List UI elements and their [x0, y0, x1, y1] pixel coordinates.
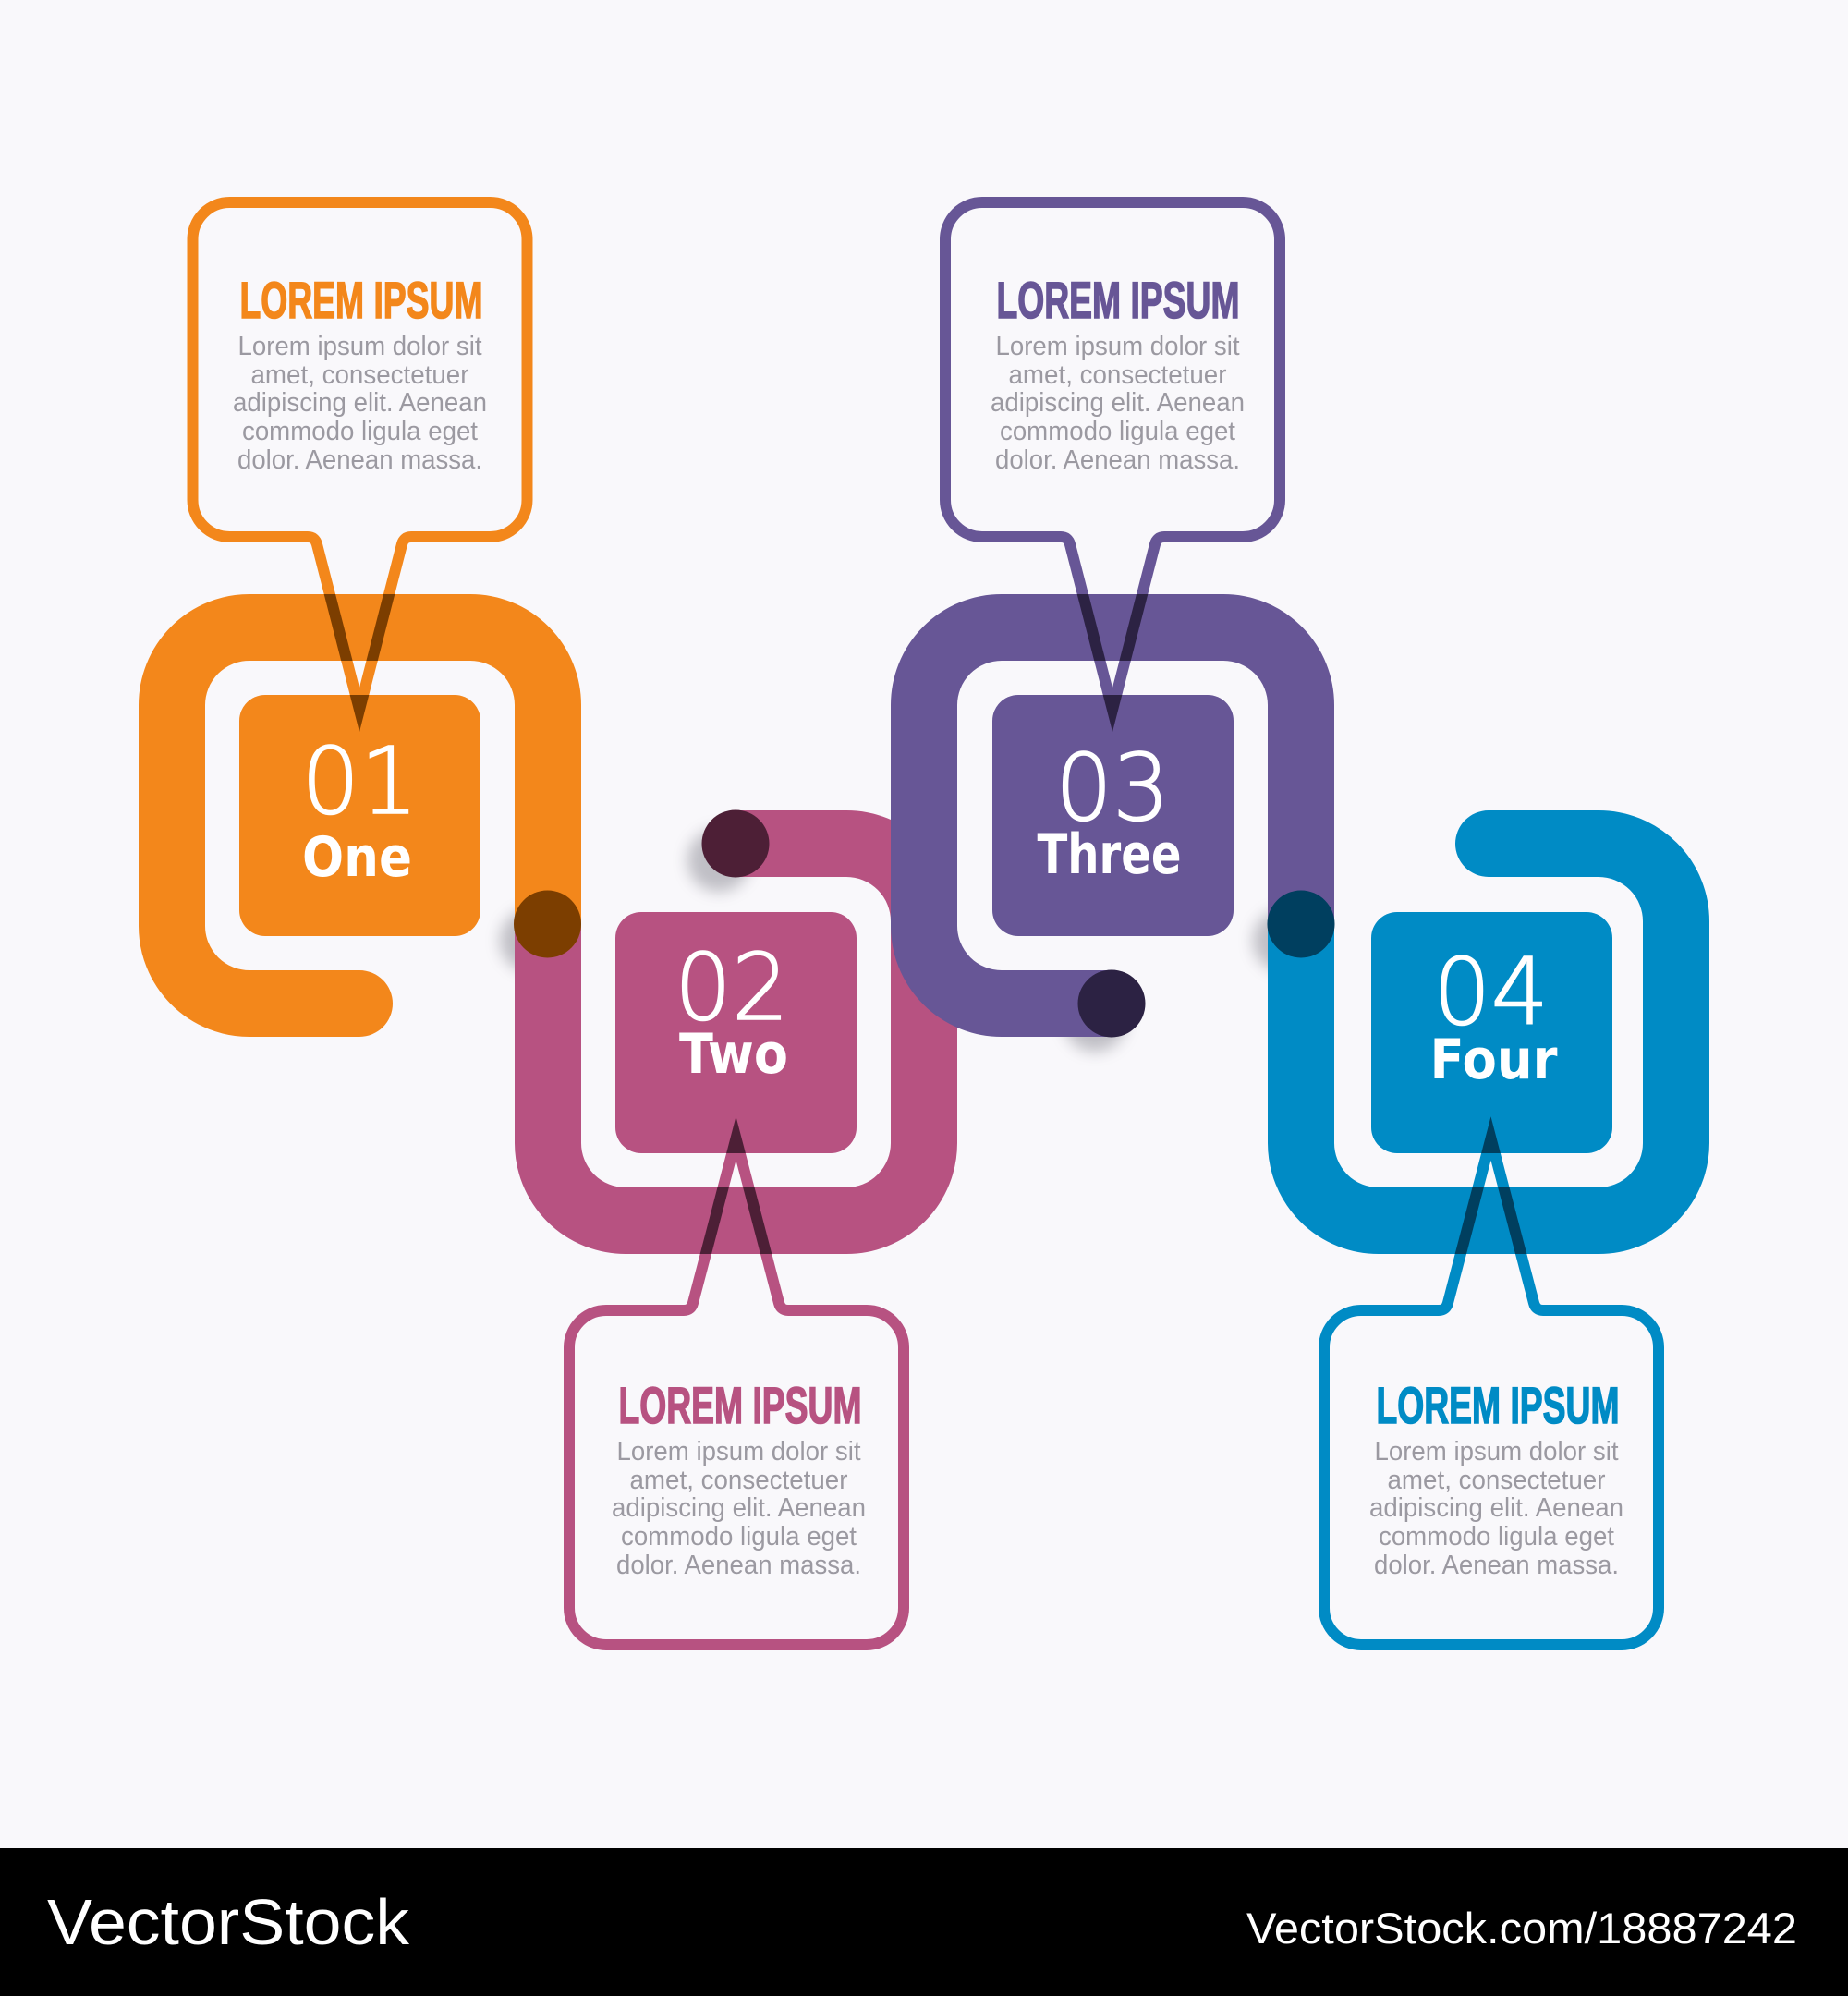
callout body 1: dolor. Aenean massa. — [237, 445, 482, 475]
panel: step 01 — [172, 627, 548, 1004]
square: step 01 — [239, 695, 480, 936]
callout heading 2: LOREM IPSUM — [619, 1376, 861, 1434]
callout: step 02 — [569, 1138, 904, 1645]
number 02: 02 — [675, 933, 789, 1041]
callout body 2: dolor. Aenean massa. — [616, 1551, 861, 1580]
label One: One — [302, 825, 412, 890]
square: step 02 — [615, 912, 857, 1153]
callout body 1 — [233, 332, 487, 475]
number 04: 04 — [1433, 938, 1549, 1046]
callout body 2 — [612, 1437, 866, 1580]
number 03: 03 — [1055, 734, 1170, 842]
footer logo text: VectorStock — [47, 1886, 410, 1958]
ring: step 01 — [172, 627, 548, 1004]
ring: step 04 — [1301, 844, 1676, 1221]
callout body 3: amet, consectetuer — [1009, 360, 1227, 390]
square: step 03 — [992, 695, 1234, 936]
callout body 1: Lorem ipsum dolor sit — [238, 332, 482, 361]
callout body 3: adipiscing elit. Aenean — [991, 388, 1245, 418]
callout body 2: commodo ligula eget — [621, 1522, 857, 1552]
panel: step 03 — [924, 627, 1301, 1004]
callout body 1: adipiscing elit. Aenean — [233, 388, 487, 418]
callout: step 04 — [1324, 1138, 1659, 1645]
callout body 2: amet, consectetuer — [630, 1466, 848, 1495]
panel: step 02 — [548, 844, 924, 1221]
ring: step 02 — [548, 844, 924, 1221]
number 01: 01 — [301, 727, 419, 835]
connector dots — [514, 809, 1334, 1037]
callout heading 3: LOREM IPSUM — [996, 271, 1240, 329]
callout body 4 — [1369, 1437, 1623, 1580]
callout body 4: Lorem ipsum dolor sit — [1375, 1437, 1619, 1467]
callout body 2: Lorem ipsum dolor sit — [617, 1437, 861, 1467]
callout body 2: adipiscing elit. Aenean — [612, 1493, 866, 1523]
callout body 4: commodo ligula eget — [1379, 1522, 1614, 1552]
footer bar — [0, 1848, 1848, 1996]
connector dot shadows — [500, 829, 1316, 1052]
callout body 4: dolor. Aenean massa. — [1374, 1551, 1619, 1580]
footer image id: VectorStock.com/18887242 — [1246, 1904, 1797, 1953]
callout body 3: commodo ligula eget — [1000, 417, 1235, 446]
label Three: Three — [1037, 822, 1181, 887]
callout heading 4: LOREM IPSUM — [1377, 1376, 1619, 1434]
label Two: Two — [679, 1022, 788, 1087]
callout body 3 — [991, 332, 1245, 475]
label Four: Four — [1430, 1028, 1558, 1092]
callout body 3: Lorem ipsum dolor sit — [996, 332, 1240, 361]
square: step 04 — [1371, 912, 1612, 1153]
callout: step 01 — [192, 202, 527, 710]
callout body 1: commodo ligula eget — [242, 417, 478, 446]
callout body 1: amet, consectetuer — [251, 360, 469, 390]
callout body 4: adipiscing elit. Aenean — [1369, 1493, 1623, 1523]
ring: step 03 — [924, 627, 1301, 1004]
callout heading 1: LOREM IPSUM — [240, 271, 482, 329]
callout: step 03 — [945, 202, 1280, 710]
callout body 4: amet, consectetuer — [1388, 1466, 1606, 1495]
callout body 3: dolor. Aenean massa. — [995, 445, 1240, 475]
panel: step 04 — [1301, 844, 1676, 1221]
